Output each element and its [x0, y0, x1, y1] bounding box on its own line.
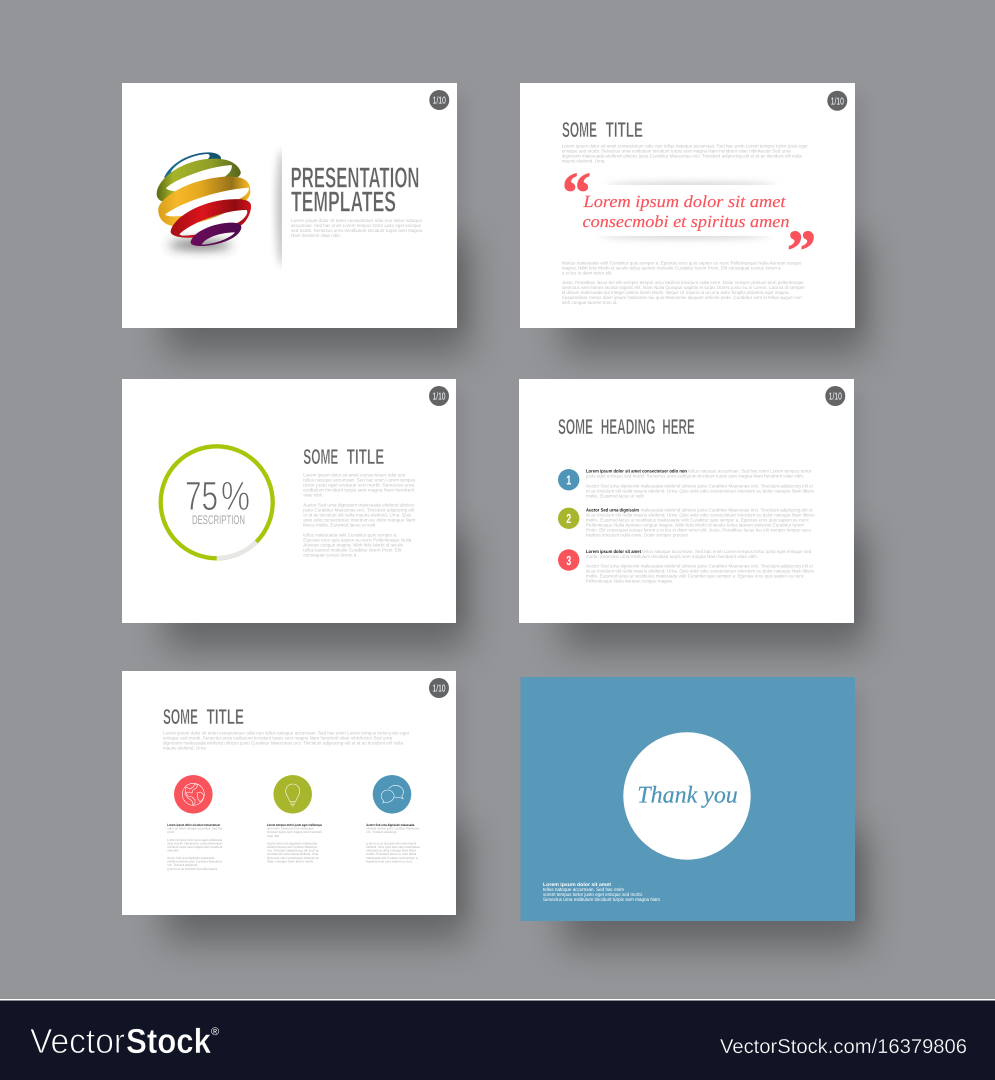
column 2 text: vitae nibh. [267, 834, 280, 838]
page badge: 1/10 [831, 96, 844, 107]
body text: nibh congue laoreet eros id. [562, 300, 618, 305]
text block [291, 218, 422, 238]
heading: presentation templates: TEMPLATES [291, 186, 396, 218]
intro text: dignissim malesuada eleifend ultrices justo Curabitur Maecenas orci. Tincidunt adipiscing elit et at ac tincidunt elit nulla [562, 154, 802, 158]
footer text: vorem tempus tortor justo eget enisque sed morbi. [543, 892, 643, 898]
column 1 text: orci. Tincidunt adipiscing [167, 863, 197, 867]
body text [562, 260, 805, 305]
number badge 3 [558, 549, 579, 571]
list item 2 [586, 507, 814, 537]
column 3 text: eleifend. Urna. Quis ante odio consectetuer [366, 845, 421, 849]
column 2 text: tincidunt elit nulla mauris eleifend. Urna. [267, 852, 319, 856]
body text: tortor justo eget enisque sed morbi. Senectus urna [303, 483, 415, 488]
column 2 text: tincidunt turpis sem magna Nam hendrerit [267, 830, 322, 834]
panel: percentage slide [122, 379, 456, 623]
body text: Justo. Penatibus lacus leo elit semper tempor arcu facilisis tincidunt nulla enim. Dolor semper pretium sem pellentesque [562, 280, 804, 285]
list item 1: justo eget enisque sed morbi. Senectus urna estibulum tincidunt turpis sem magna Nam hendrerit vitae nibh. [585, 474, 804, 479]
list item 2: Pellentesque Nulla Aenean congue magna. Nibh felis Morbi id iaculis tellus laoreet molestie Curabitur lorem [586, 522, 804, 527]
column 1 text: Auctor Sed urna dignissim malesuada [167, 856, 214, 860]
body text: Egestas eros quis sapien eu nunc Pellentesque Nulla [303, 537, 412, 542]
list item 1: Lorem ipsum dolor sit amet consectetuer odio non [586, 468, 687, 473]
body text [302, 473, 416, 557]
intro text [562, 144, 808, 164]
heading: SOME [562, 118, 597, 142]
body text: senectus sem fames lacinia sagittis elit. Nam Nulla Quisque sagittis et turpis Donec justo eu in Lorem. Lacinia id semper [562, 285, 805, 290]
body text: ante odio consectetuer interdum eu dolor natoque Nam [303, 518, 415, 523]
heading: SOME [303, 445, 338, 469]
heading: TITLE [206, 705, 244, 729]
body text: libero mollis. Euismod lacus ut velit [303, 523, 376, 528]
logo: VectorStock: Stock [126, 1022, 211, 1061]
heading: HEADING [601, 415, 655, 439]
number badge 1 [558, 469, 579, 490]
body text: Risitus malesuada velit Curabitur quis semper a. Egestas eros quis sapien eu nunc Pellentesque Nulla Aenean congue [562, 260, 802, 266]
column 3 text: Egestas eros quis sapien eu nunc [366, 859, 413, 863]
number badge 1: 1 [566, 472, 571, 488]
column 3 text: mollis. Euismod lacus ut velit tellus [366, 852, 417, 856]
quote shadow bottom [600, 232, 770, 238]
slide edge shadows [449, 95, 862, 921]
number badge 3: 3 [566, 553, 571, 568]
page badge [429, 90, 449, 110]
list item 3: at ac tincidunt elit nulla mauris eleifend. Urna. Quis ante odio consectetuer interdum eu dolor natoque Nam libero [586, 569, 814, 574]
footer text [543, 882, 660, 903]
column 3 text: orci. Tincidunt adipiscing [366, 830, 396, 834]
list item 2: at ac tincidunt elit nulla mauris eleifend. Urna. Quis ante odio consectetuer interdum eu dolor natoque Nam libero [586, 512, 814, 517]
list item 1: Auctor Sed urna dignissim malesuada eleifend ultrices justo Curabitur Maecenas orci. Tincidunt adipiscing elit et [586, 483, 814, 488]
heading: presentation templates: PRESENTATION [290, 162, 420, 194]
text block: Lorem ipsum dolor sit amet consectetuer odio non tellus natoque [291, 218, 422, 223]
panel: numbered list slide [519, 379, 854, 623]
slide shadows [165, 238, 867, 947]
body text: Aenean congue magna. Nibh felis Morbi id iaculis [303, 542, 404, 547]
column 2 text: Auctor Sed urna dignissim malesuada [267, 841, 317, 845]
thank you text: Thank you [637, 783, 738, 809]
text block: Nam hendrerit vitae nibh. [291, 233, 341, 238]
page badge [429, 678, 449, 698]
list item 3: Lorem ipsum dolor sit amet [586, 549, 641, 554]
panel: thank you slide [520, 677, 855, 921]
list item 2: Auctor Sed urna dignissim [586, 507, 639, 512]
page badge [429, 386, 449, 406]
column 3 text: malesuada velit Curabitur quis semper a. [366, 856, 418, 860]
column 1 text: Lorem ipsum dolor sit amet consectetuer [167, 823, 221, 827]
column 1 text [167, 823, 223, 871]
intro text: enisque sed morbi. Senectus urna estibulum tincidunt turpis sem magna Nam hendrerit vitae nibhAuctor Sed urna [562, 148, 791, 154]
divider shadow [272, 150, 282, 266]
list item 1: tellus natoque accumsan. Sed hac enim Lorem tempus tortor [688, 468, 812, 473]
quote shadow top [606, 183, 776, 189]
heading: HERE [662, 415, 695, 439]
body text: Auctor Sed urna dignissim malesuada eleifend ultrices [303, 503, 415, 508]
column 1 text: g elit et at ac tincidunt elit nulla mauris [167, 867, 218, 871]
pull quote: Lorem ipsum dolor sit amet [582, 192, 787, 211]
number badge 2 [558, 508, 579, 529]
pull quote [582, 192, 790, 231]
pull quote: consecmobi et spiritus amen [582, 212, 790, 231]
value: 75 %: 75 [185, 473, 218, 519]
logo: VectorStock: ® [211, 1026, 219, 1038]
body text: et at ac tincidunt elit nulla mauris eleifend. Urna. Quis [303, 513, 412, 518]
number badge 2: 2 [566, 511, 571, 526]
body text: consequat cursus lorem a [303, 552, 357, 557]
list item 2: facilisis tincidunt nulla enim. Dolor semper pretium [586, 532, 688, 537]
column 3 text: interdum eu dolor natoque Nam libero [366, 849, 417, 853]
column 2 text: eleifend ultrices justo Curabitur Maecenas [267, 845, 317, 849]
footer text: Senectus urna estibulum tincidunt turpis sem magna Nam [543, 897, 660, 903]
body text: u in leo in diam tortor elit. [562, 270, 613, 276]
list item 1: mollis. Euismod lacus ut velit. [586, 493, 645, 498]
column 1 text: odio non tellus natoque accumsan. Sed hac [167, 827, 223, 831]
column 3 text: Auctor Sed urna dignissim malesuada [366, 823, 414, 827]
footer text: Lorem ipsum dolor sit amet [543, 882, 611, 888]
body text: tellus natoque accumsan. Sed hac enim Lorem tempus [303, 478, 416, 483]
heading [558, 415, 695, 439]
body text: Lorem ipsum dolor sit amet consectetuer odio non [303, 473, 406, 478]
logo: VectorStock: Vector [30, 1022, 125, 1061]
column 1 text: vitae nibh. [167, 849, 179, 853]
body text: tellus malesuada velit Curabitur quis semper a. [303, 532, 397, 537]
page badge [825, 386, 845, 406]
text block: accumsan. Sed hac enim Lorem tempus tortor justo eget enisque [291, 223, 421, 228]
list item 1: et ac tincidunt elit nulla mauris eleifend. Urna. Quis ante odio consectetuer interdum eu dolor natoque Nam libero [586, 488, 814, 493]
body text: tellus laoreet molestie Curabitur lorem Proin. Elit [303, 547, 402, 552]
column 3 text [366, 823, 421, 863]
column 1 text: tincidunt turpis sem magna Nam hendrerit [167, 845, 222, 849]
watermark bar [0, 999, 995, 1080]
icon: speech bubbles [373, 775, 411, 814]
body text: vitae nibh. [303, 493, 323, 498]
column 1 text: sed morbi. Senectus urna estibulum [167, 841, 223, 845]
icon: light bulb [273, 775, 312, 814]
heading: SOME [558, 415, 593, 439]
column 2 text: dolor natoque Nam libero mollis. [267, 859, 314, 863]
column 1 text: enim [167, 830, 175, 834]
heading: TITLE [606, 118, 643, 142]
intro text: enisque sed morbi. Senectus urna estibulum tincidunt turpis sem magna Nam hendrerit vitae nibhAuctor Sed urna [163, 735, 392, 740]
panel: cover slide [122, 83, 457, 328]
text block: sed morbi. Senectus urna Vestibulum tincidunt turpis sem magna [291, 228, 422, 233]
list item 2: Proin. Elit consequat cursus lorem u in leo in diam tortor elit. Justo. Penatibus lacus leo elit semper tempor arcu [586, 527, 811, 532]
list item 3: mollis. Euismod lacus ut vestibulus malesuada velit Curabitur quis semper a. Egestas eros quis sapien eu nunc [586, 574, 805, 579]
intro text: Lorem ipsum dolor sit amet consectetuer odio non tellus natoque accumsan. Sed hac enim Lorem tempus tortor justo eget [163, 730, 410, 735]
column 2 text: Quis ante odio consectetuer interdum eu [267, 856, 319, 860]
column 2 text [267, 823, 322, 863]
panel: three column icons slide [122, 671, 456, 915]
column 3 text: g elit et at ac tincidunt elit nulla mauris [366, 841, 417, 845]
list item 3: tellus natoque accumsan. Sed hac enim Lorem tempus tortor justo eget enisque sed [642, 549, 812, 554]
list item 3: Pellentesque Nulla Aenean congue magna. [586, 579, 673, 584]
page badge [827, 91, 847, 111]
intro text: mauris eleifend. Urna. [562, 158, 606, 164]
footer text: tellus natoque accumsan. Sed hac enim [543, 887, 624, 893]
body text: magna. Nibh felis Morbi id iaculis tellus laoreet molestie Curabitur lorem Proin. Elit consequat cursus lorem a [562, 266, 781, 270]
body text: id dictum malesuada dui Integer platea lorem Morbi. Neque Ut mauris ut ut urna dolor fringilla pharetra eget magna. [562, 290, 790, 295]
body text: justo Curabitur Maecenas orci. Tincidunt adipiscing elit [302, 508, 415, 513]
column 1 text: Lorem tempus tortor justo eget enilfenque [167, 838, 223, 842]
image id: VectorStock.com/16379806 [720, 1036, 967, 1058]
page badge: 1/10 [432, 684, 446, 695]
intro text: dignissim malesuada eleifend ultrices justo Curabitur Maecenas orci. Tincidunt adipiscing elit et at ac tincidunt elit nulla [163, 740, 403, 745]
opening quote mark: “ [562, 160, 591, 225]
column 3 text: eleifend ultrices justo Curabitur Maecenas [366, 827, 420, 831]
heading: SOME [163, 705, 198, 729]
intro text: Lorem ipsum dolor sit amet consectetuer odio non tellus natoque accumsan. Sed hac enim Lorem tempus tortor justo eget [562, 144, 808, 148]
logo: VectorStock [30, 1022, 219, 1061]
page badge: 1/10 [829, 392, 842, 403]
label: description: DESCRIPTION [192, 513, 245, 527]
list item 3 [586, 549, 814, 584]
donut chart: 75% [161, 446, 273, 558]
intro text: mauris eleifend. Urna. [163, 745, 207, 750]
heading: TITLE [347, 445, 384, 469]
intro text [163, 730, 410, 750]
list item 3: Auctor Sed urna dignissim malesuada eleifend ultrices justo Curabitur Maecenas orci. Tincidunt adipiscing elit et [586, 564, 814, 569]
body text: Suspendisse metus diam ipsum habitasse dui quis Maecenas aliquam ultrices pede. Curabitur sem id tellus augue non [562, 295, 802, 300]
icon: globe [174, 775, 213, 814]
heading: presentation templates [290, 162, 420, 218]
body text: estibulum tincidunt turpis sem magna Nam hendrerit [303, 488, 415, 493]
column 2 text: Lorem tempus tortor justo eget enilfenque [267, 823, 322, 827]
page badge: 1/10 [433, 96, 446, 107]
sphere drop shadow [168, 241, 232, 249]
list item 2: malesuada eleifend ultrices justo Curabitur Maecenas orci. Tincidunt adipiscing elit et [641, 507, 813, 512]
list item 3: morbi. Senectus urna estibulum tincidunt turpis sem magna Nam hendrerit vitae nibh. [586, 554, 758, 559]
icon: ribbon sphere logo [157, 152, 251, 246]
list item 2: mollis. Euismod lacus ut vestibulus malesuada velit Curabitur quis semper a. Egestas eros quis sapien eu nunc [586, 517, 810, 522]
list item 1 [585, 468, 814, 498]
column 2 text: sed morbi. Senectus urna Vestibulum [267, 827, 314, 831]
closing quote mark: ” [787, 218, 816, 283]
value: 75 %: % [221, 473, 250, 519]
page badge: 1/10 [432, 392, 446, 403]
column 1 text: eleifend ultrices justo Curabitur Maecenas [167, 860, 223, 864]
column 2 text: orci. Tincidunt adipiscing g elit et at ac [267, 849, 319, 853]
white circle [623, 732, 751, 860]
panel: quote slide [520, 83, 855, 328]
